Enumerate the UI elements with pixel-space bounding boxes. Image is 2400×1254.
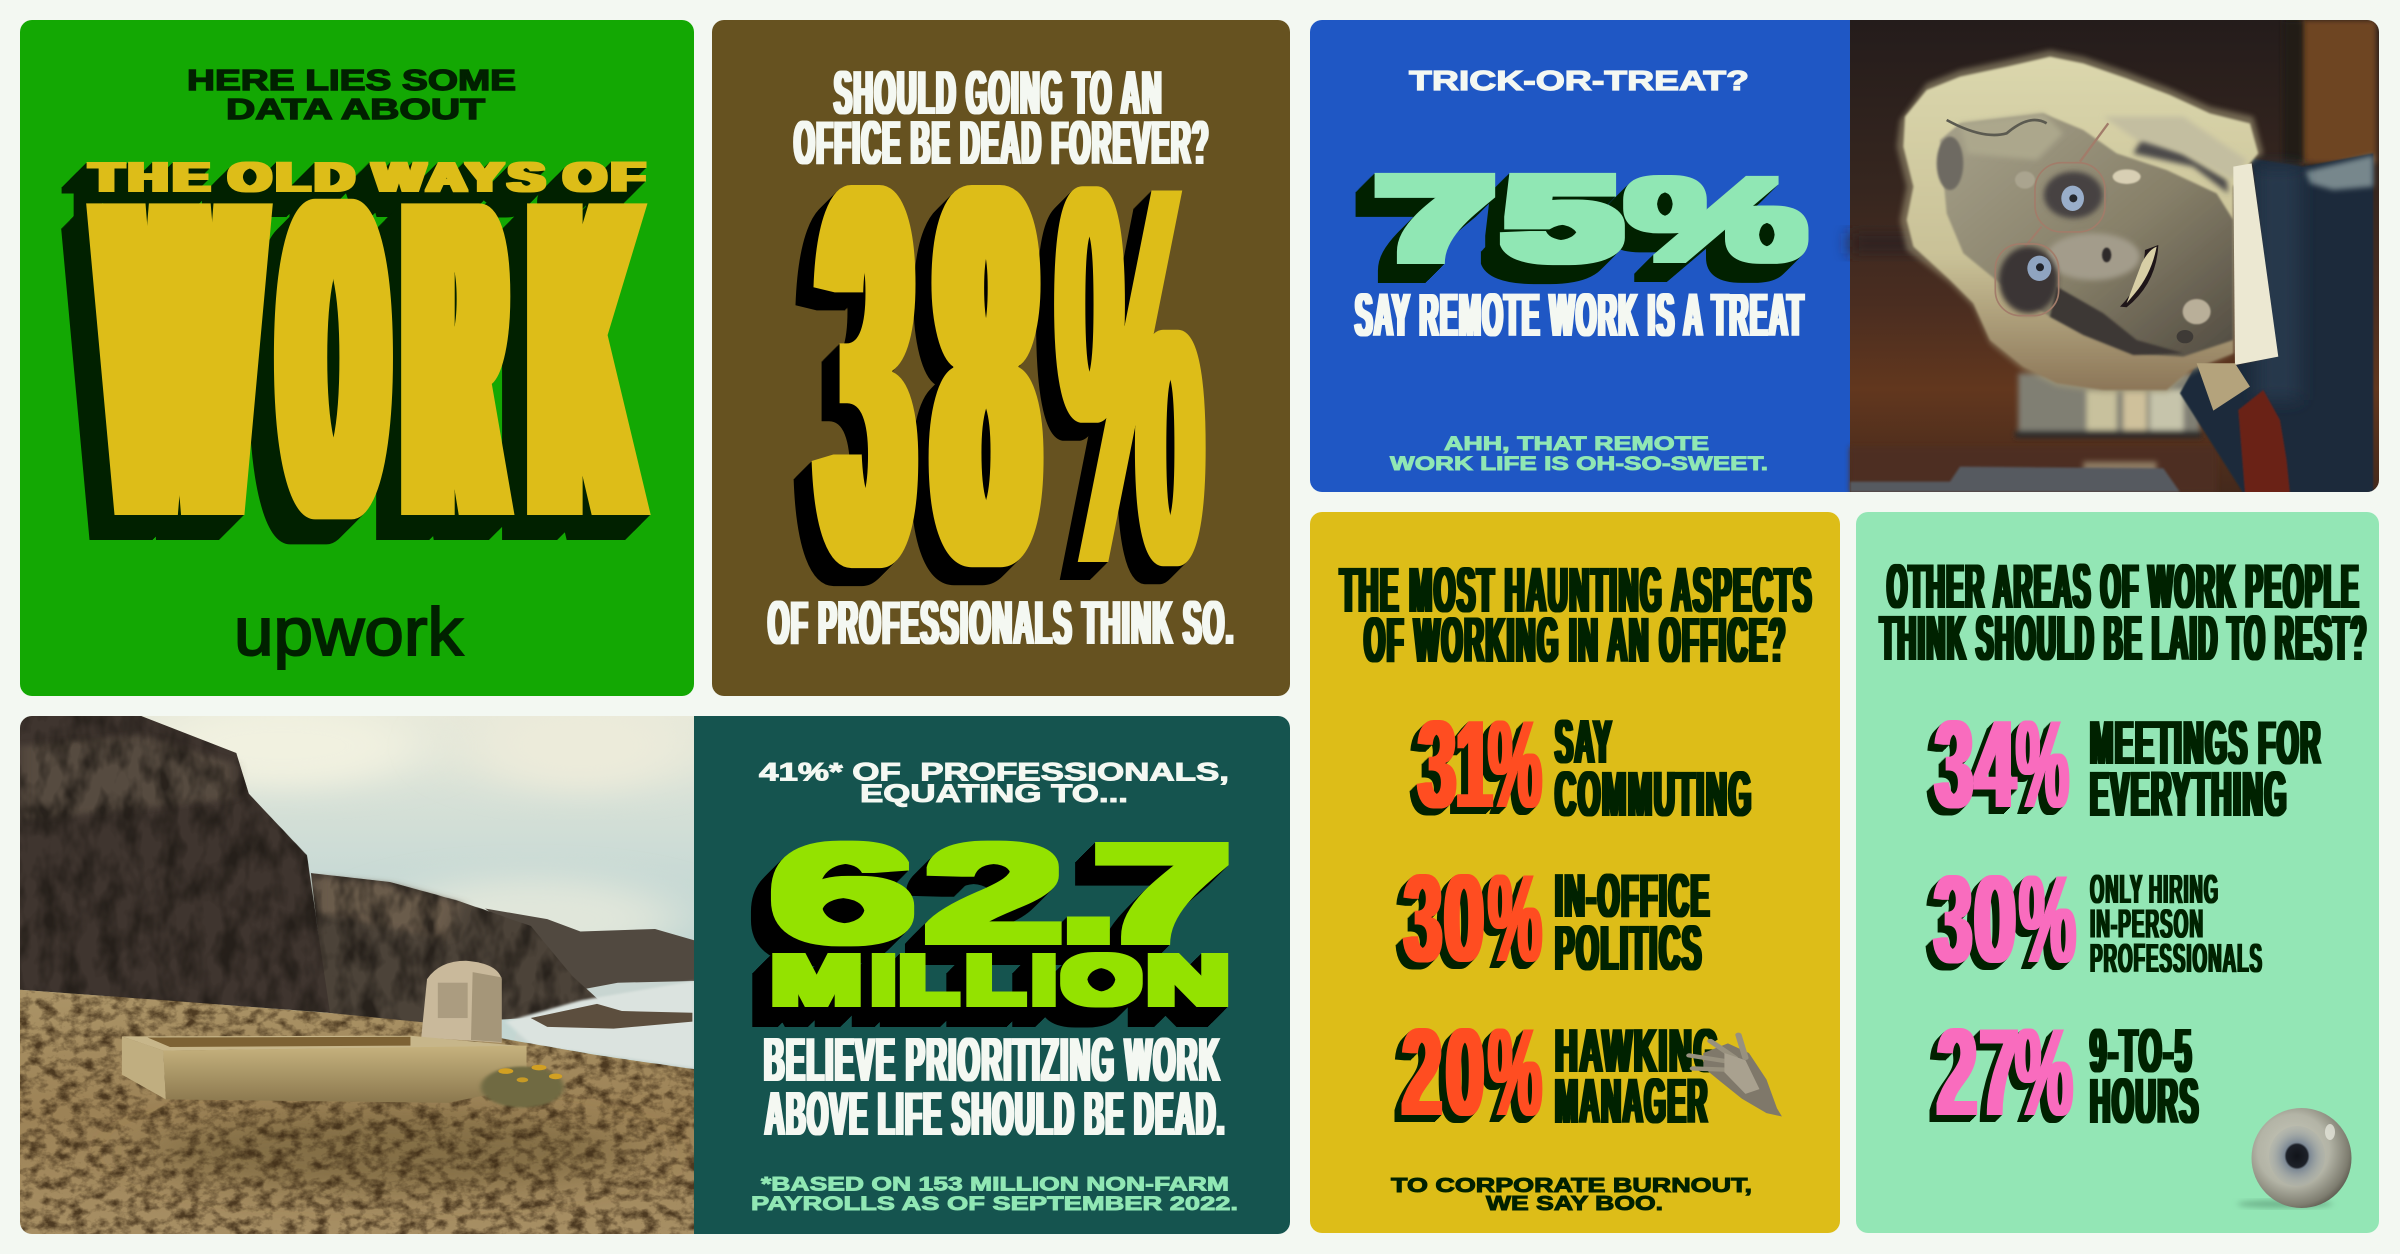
panel: most haunting aspects: SAY — [1555, 708, 1613, 777]
panel: other areas laid to rest: IN-PERSON — [2090, 900, 2204, 946]
stat 34%: 3 — [1935, 696, 1973, 834]
panel: trick or treat stat: SAY REMOTE WORK IS A TREAT — [1355, 281, 1805, 349]
panel: most haunting aspects: COMMUTING — [1555, 758, 1753, 830]
stat 31% — [1418, 696, 1542, 834]
footer line two: WE SAY BOO. — [1486, 1193, 1663, 1215]
surf and rocks — [506, 981, 694, 1068]
footnote line two: WORK LIFE IS OH-SO-SWEET. — [1390, 453, 1768, 475]
big stat 75%: 7 — [1373, 155, 1497, 283]
stat 31%: 1 — [1456, 696, 1492, 834]
headline: work: R — [411, 105, 499, 611]
footnote line one: AHH, THAT REMOTE — [1444, 433, 1709, 455]
big stat million: I — [872, 943, 894, 1018]
grave tomb — [122, 1036, 527, 1051]
stat 30%: 3 — [1934, 851, 1972, 989]
panel: office dead forever stat: OFFICE BE DEAD FOREVER? — [794, 109, 1210, 178]
big stat 62.7: . — [1058, 817, 1119, 971]
text: K — [536, 105, 634, 611]
icon: eyeball — [2237, 1108, 2352, 1208]
panel: title card — [20, 20, 694, 696]
panel: trick or treat stat — [1310, 20, 2383, 493]
panel: other areas laid to rest — [1856, 512, 2379, 1233]
stat 30%: 3 — [1404, 850, 1442, 988]
upper eye and lens — [2025, 123, 2108, 247]
big stat million: M — [771, 943, 862, 1018]
panel: most haunting aspects: % — [1488, 850, 1542, 988]
kicker line one: HERE LIES SOME — [187, 65, 516, 97]
mouth and teeth — [2120, 245, 2158, 307]
big stat million: N — [1146, 943, 1230, 1018]
heading: TRICK-OR-TREAT? — [1409, 65, 1749, 96]
panel: other areas laid to rest: ONLY HIRING — [2090, 866, 2219, 912]
flower bush — [481, 1065, 564, 1107]
lower eye and lens — [1995, 244, 2059, 316]
stat 27%: % — [2015, 1004, 2073, 1142]
stat 27% — [1937, 1004, 2073, 1142]
intro line one: 41%* OF PROFESSIONALS, — [759, 758, 1229, 786]
stat 30%: 0 — [1444, 850, 1484, 988]
photo: zombie office worker — [1850, 20, 2383, 493]
big stat 62.7: 2 — [922, 817, 1066, 971]
footnote line two: PAYROLLS AS OF SEPTEMBER 2022. — [751, 1193, 1238, 1215]
panel: most haunting aspects: % — [1488, 696, 1542, 834]
grave stone — [421, 961, 502, 1043]
desk and keyboard — [1850, 447, 2217, 493]
panel: office dead forever stat — [712, 20, 1290, 696]
hair — [1897, 50, 2263, 393]
text: OF WORKING IN AN OFFICE? — [1364, 604, 1787, 676]
stat 34%: 4 — [1975, 696, 2015, 834]
stat 30%: % — [2019, 851, 2076, 989]
stat 27%: 2 — [1937, 1004, 1977, 1142]
stat 20%: 2 — [1402, 1004, 1442, 1142]
footnote line one: *BASED ON 153 MILLION NON-FARM — [761, 1174, 1229, 1196]
big stat 75%: % — [1624, 156, 1808, 284]
text: % — [1057, 74, 1203, 677]
text: ABOVE LIFE SHOULD BE DEAD. — [765, 1080, 1226, 1149]
big stat million: O — [1062, 943, 1141, 1018]
stat 27%: 7 — [1980, 1004, 2018, 1142]
headline: the old ways of: THE OLD WAYS OF — [90, 154, 650, 200]
big stat million: L — [900, 943, 958, 1018]
panel: other areas laid to rest: HOURS — [2090, 1065, 2200, 1137]
footer line one: TO CORPORATE BURNOUT, — [1391, 1175, 1752, 1197]
stat 31%: 3 — [1418, 696, 1456, 834]
stat 30% — [1404, 850, 1542, 988]
big stat 38%: 8 — [937, 74, 1035, 677]
text block background — [694, 716, 1290, 1234]
ground — [20, 990, 694, 1235]
headline: work: O — [287, 105, 380, 611]
big stat million: I — [1033, 943, 1055, 1018]
stat 34% — [1935, 696, 2069, 834]
panel: other areas laid to rest: 9-TO-5 — [2090, 1017, 2193, 1086]
far cliff — [485, 909, 694, 990]
big stat 75%: 5 — [1501, 155, 1623, 283]
headline: work: W — [104, 105, 256, 611]
big stat 38%: 3 — [822, 74, 910, 677]
near cliff — [20, 716, 330, 1013]
stat 30%: 0 — [1974, 851, 2016, 989]
label hawking: HAWKING — [1555, 1017, 1720, 1086]
big stat 62.7: 6 — [767, 817, 918, 971]
background monitor — [2015, 373, 2202, 438]
panel: most haunting aspects: POLITICS — [1555, 912, 1703, 984]
big stat 62.7: 7 — [1090, 817, 1234, 971]
panel: most haunting aspects — [1310, 512, 1840, 1233]
middle cliff — [311, 873, 601, 1023]
stat 20% — [1402, 1004, 1542, 1142]
stat 20%: 0 — [1446, 1004, 1484, 1142]
panel: most haunting aspects: % — [1488, 1004, 1542, 1142]
icon: zombie hand — [1689, 1035, 1782, 1117]
big stat million: L — [966, 943, 1024, 1018]
logo: upwork: upwork — [234, 594, 464, 670]
intro line two: EQUATING TO... — [860, 780, 1128, 808]
photo: grave on coastal cliff — [20, 700, 697, 1240]
stat 30% — [1934, 851, 2076, 989]
shirt collar — [2233, 163, 2278, 365]
suit jacket — [2180, 153, 2373, 493]
panel: prioritizing work stat: BELIEVE PRIORITIZING WORK — [764, 1026, 1221, 1095]
panel: prioritizing work stat — [20, 700, 1290, 1240]
panel: office dead forever stat: SHOULD GOING TO AN — [834, 59, 1163, 128]
panel: other areas laid to rest: % — [2016, 696, 2069, 834]
necktie — [2238, 390, 2290, 493]
kicker line two: DATA ABOUT — [226, 94, 486, 126]
head — [1937, 113, 2247, 357]
big stat 75% — [1373, 155, 1808, 284]
panel: most haunting aspects: MANAGER — [1555, 1065, 1709, 1137]
panel: most haunting aspects: IN-OFFICE — [1555, 862, 1711, 931]
text: OF PROFESSIONALS THINK SO. — [768, 589, 1235, 658]
